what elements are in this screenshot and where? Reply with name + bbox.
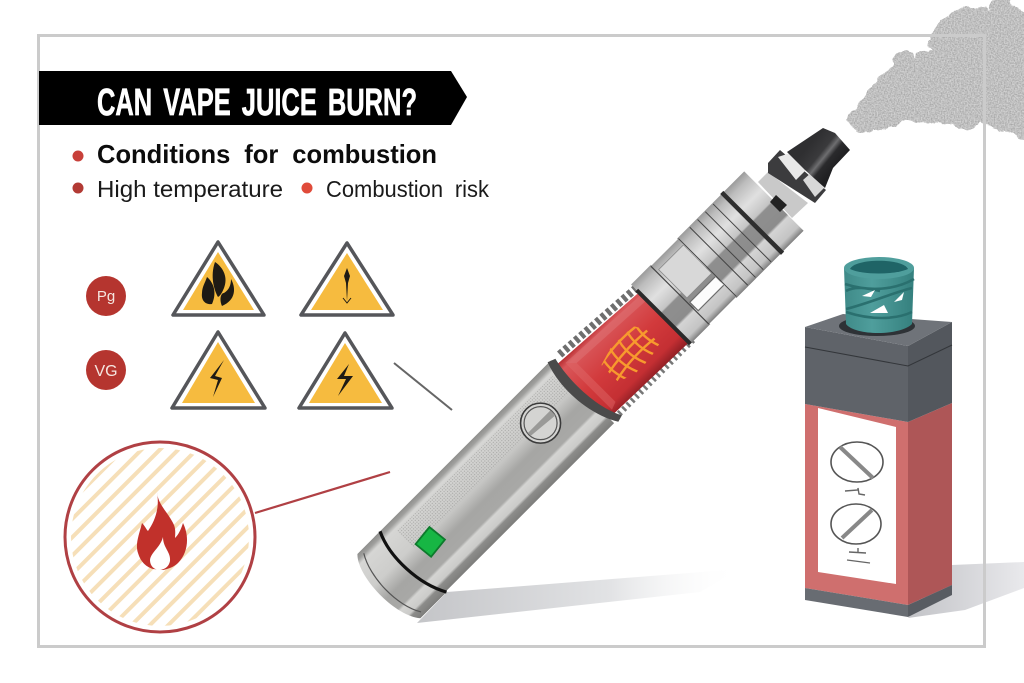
callout: flame magnifier — [65, 442, 255, 632]
cap sides — [805, 322, 952, 422]
vape pen — [348, 169, 806, 627]
cap top — [805, 314, 952, 346]
drip tip collar — [768, 150, 826, 203]
battery body — [374, 360, 614, 600]
tank ribbed section — [677, 193, 782, 298]
warning triangle: flame — [173, 242, 264, 315]
warning triangle: bolt 2 — [299, 333, 392, 408]
title banner — [39, 71, 467, 125]
tank base and window — [630, 238, 737, 345]
pointer line — [394, 363, 452, 410]
smoke cloud — [849, 0, 1024, 139]
ribs — [560, 280, 694, 414]
vape neck — [758, 172, 808, 218]
bottle right face — [908, 403, 952, 605]
vape shadow — [417, 569, 740, 623]
warning triangle: arrow — [301, 243, 393, 315]
heating mesh — [602, 326, 660, 381]
badge: VG: VG — [94, 363, 118, 380]
mouthpiece — [787, 128, 850, 188]
red tank glass — [556, 285, 692, 420]
badge: PG — [86, 276, 126, 316]
juice bottle — [805, 257, 952, 617]
bottle shadow — [908, 562, 1024, 618]
tank top — [720, 171, 804, 255]
badge: PG: Pg — [97, 288, 115, 305]
badge: VG — [86, 350, 126, 390]
base band — [805, 585, 952, 617]
end cap — [348, 528, 447, 627]
label — [818, 408, 896, 584]
bullet: high temperature: High temperature — [97, 176, 283, 202]
teal neck — [839, 257, 915, 336]
dark collar — [543, 352, 623, 432]
bullet heading: Conditions for combustion — [97, 139, 437, 169]
bullet: combustion risk: Combustion risk — [326, 176, 489, 202]
fire button — [512, 395, 569, 451]
title banner: CAN VAPE JUICE BURN? — [97, 82, 417, 124]
warning triangle: bolt — [172, 332, 265, 408]
status light — [416, 527, 445, 557]
bottle front face — [805, 404, 908, 605]
callout line — [255, 472, 390, 513]
